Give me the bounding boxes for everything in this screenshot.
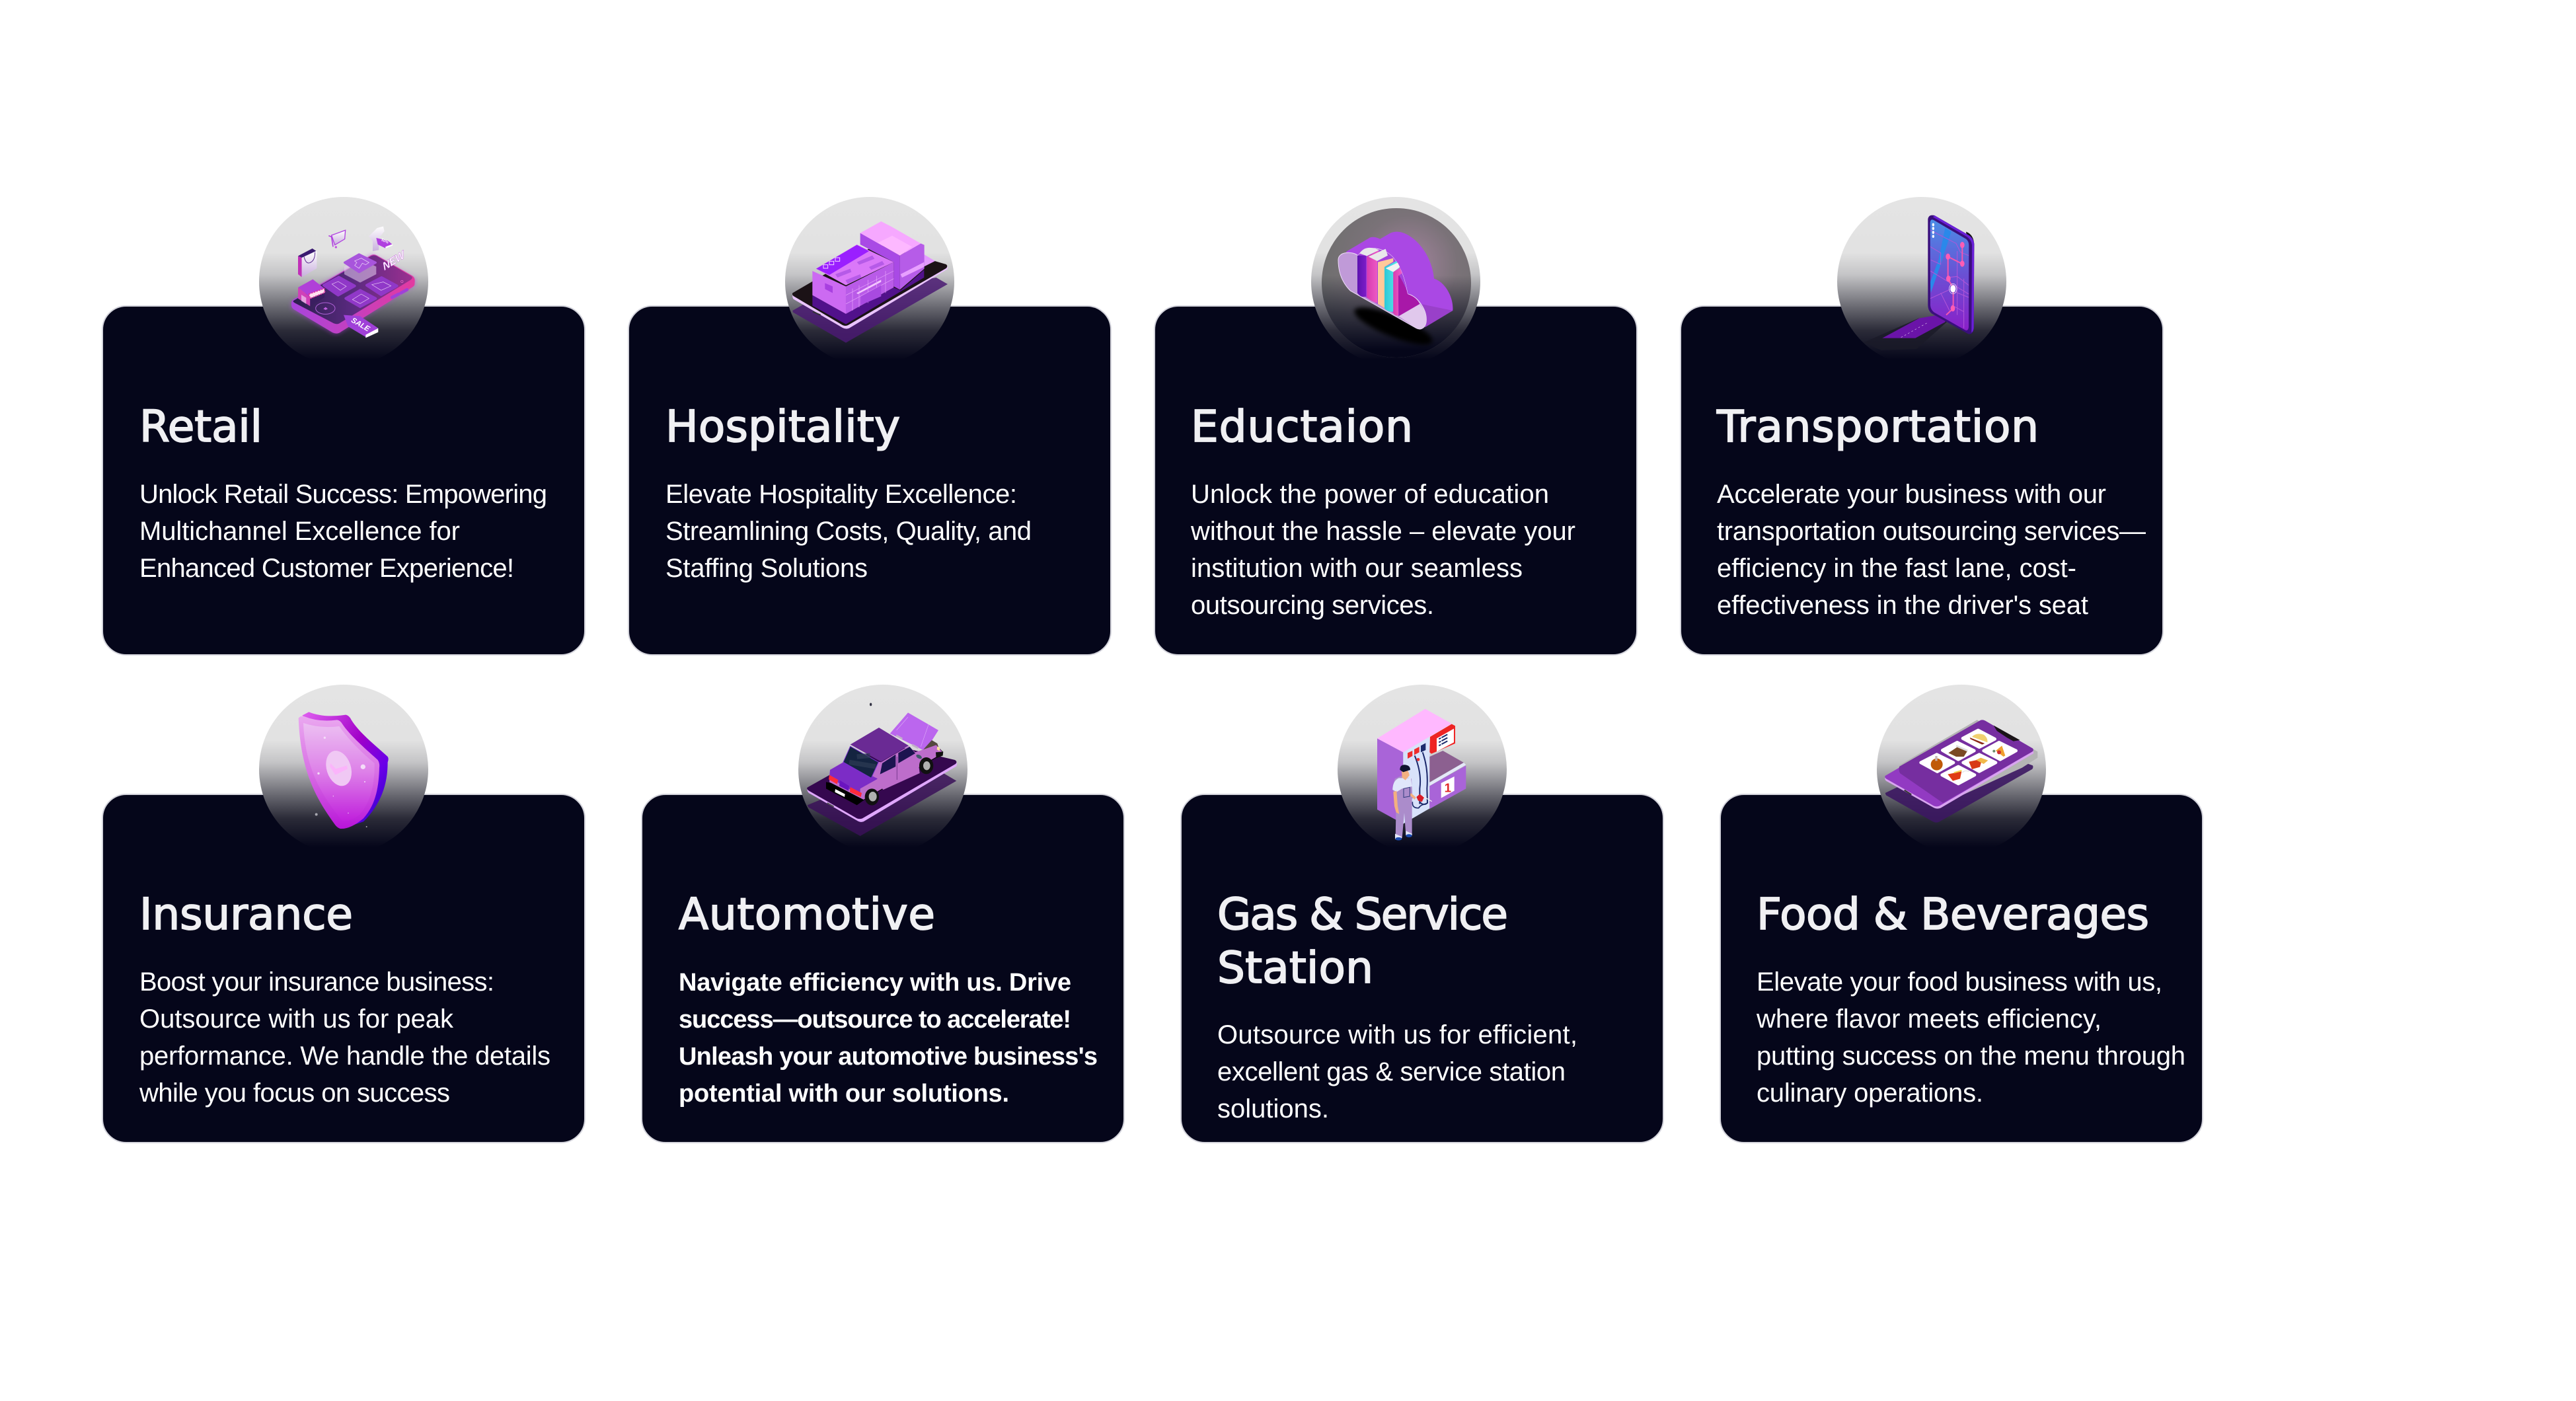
upper block bbox=[860, 233, 900, 289]
attendant bbox=[1392, 765, 1416, 841]
panel background: retail bbox=[102, 306, 585, 655]
body text: insurance bbox=[139, 967, 550, 1108]
body text: automotive bbox=[679, 969, 1098, 1108]
body text: insurance: while you focus on success bbox=[139, 1079, 450, 1108]
tiles bbox=[324, 277, 355, 295]
body text: education: outsourcing services. bbox=[1191, 591, 1434, 620]
body text: gas and service station: Outsource with us for efficient, bbox=[1217, 1020, 1577, 1049]
heading: gas and service station bbox=[1217, 889, 1508, 993]
body text: transportation: efficiency in the fast lane, cost- bbox=[1717, 554, 2076, 583]
body text: insurance: Boost your insurance business: bbox=[139, 967, 494, 997]
circle button bbox=[316, 303, 335, 314]
body text: food and beverages: putting success on the menu through bbox=[1757, 1041, 2185, 1071]
body text: automotive: Navigate efficiency with us. Drive bbox=[679, 969, 1071, 997]
icon circle and illustration: hotel on phone bbox=[785, 197, 954, 366]
icon circle and illustration: retail phone store: SALE bbox=[350, 317, 371, 334]
icon circle and illustration: retail phone store bbox=[259, 197, 428, 366]
card: hospitality bbox=[628, 197, 1111, 655]
body text: hospitality: Elevate Hospitality Excellence: bbox=[665, 480, 1017, 509]
wheels bbox=[865, 788, 879, 806]
body text: insurance: performance. We handle the details bbox=[139, 1041, 550, 1071]
card: retail bbox=[102, 197, 585, 655]
body text: retail: Multichannel Excellence for bbox=[139, 517, 460, 546]
body text: automotive: Unleash your automotive business's bbox=[679, 1043, 1098, 1071]
heading: transportation: Transportation bbox=[1716, 401, 2039, 452]
body text: retail: Enhanced Customer Experience! bbox=[139, 554, 514, 583]
body text: education: Unlock the power of education bbox=[1191, 480, 1549, 509]
body text: hospitality bbox=[665, 480, 1032, 583]
heading: insurance: Insurance bbox=[139, 889, 353, 940]
panel background: education bbox=[1155, 306, 1637, 655]
icon circle and illustration: phone with route map bbox=[1837, 197, 2006, 366]
body text: gas and service station: excellent gas & service station bbox=[1217, 1057, 1566, 1086]
body text: automotive: potential with our solutions. bbox=[679, 1080, 1009, 1108]
card: transportation bbox=[1681, 197, 2163, 655]
body text: retail bbox=[139, 480, 547, 583]
body text: retail: Unlock Retail Success: Empowering bbox=[139, 480, 547, 509]
body text: transportation: effectiveness in the driver's seat bbox=[1717, 591, 2088, 620]
cabin bbox=[851, 728, 909, 762]
icon circle and illustration: fuel pump with attendant bbox=[1338, 685, 1507, 854]
body text: food and beverages: Elevate your food business with us, bbox=[1757, 967, 2162, 997]
car body bbox=[826, 745, 943, 805]
body text: automotive: success—outsource to accelerate! bbox=[679, 1006, 1071, 1034]
heading: gas and service station: Gas & Service bbox=[1217, 889, 1508, 940]
panel background: transportation bbox=[1681, 306, 2163, 655]
panel background: gas and service station bbox=[1181, 794, 1663, 1143]
books bbox=[1357, 256, 1366, 297]
body text: gas and service station bbox=[1217, 1020, 1577, 1123]
body text: education: institution with our seamless bbox=[1191, 554, 1523, 583]
body text: transportation bbox=[1717, 480, 2146, 620]
body text: food and beverages: where flavor meets efficiency, bbox=[1756, 1004, 2102, 1034]
cart bbox=[332, 230, 346, 245]
body text: transportation: transportation outsourcing services— bbox=[1717, 517, 2146, 546]
shirt and tag bbox=[369, 227, 385, 251]
icon circle and illustration: food menu on phone bbox=[1877, 685, 2046, 854]
wing bbox=[901, 254, 935, 278]
body text: hospitality: Streamlining Costs, Quality, and bbox=[665, 517, 1032, 546]
store bbox=[298, 280, 324, 297]
food icons bbox=[1972, 734, 1987, 742]
bag bbox=[298, 256, 302, 277]
body text: insurance: Outsource with us for peak bbox=[139, 1004, 454, 1034]
icon circle and illustration: car on phone bbox=[798, 685, 967, 854]
building reflection bbox=[812, 270, 924, 324]
heading: education: Eductaion bbox=[1191, 401, 1413, 452]
icon circle and illustration: fuel pump with attendant: 1 bbox=[1445, 780, 1451, 794]
card: education bbox=[1155, 197, 1637, 655]
card: insurance bbox=[102, 685, 585, 1143]
icon circle and illustration: retail phone store: 50% bbox=[381, 238, 389, 245]
heading: automotive: Automotive bbox=[679, 889, 935, 940]
icon circle and illustration: shield bbox=[259, 685, 428, 854]
body text: hospitality: Staffing Solutions bbox=[665, 554, 868, 583]
body text: food and beverages: culinary operations. bbox=[1757, 1079, 1983, 1108]
body text: transportation: Accelerate your business with our bbox=[1717, 480, 2106, 509]
arrow SALE bbox=[344, 315, 378, 337]
hood bbox=[890, 712, 938, 751]
icon circle and illustration: cloud with books bbox=[1311, 197, 1480, 366]
main block bbox=[812, 271, 846, 314]
heading: food and beverages: Food & Beverages bbox=[1757, 889, 2149, 940]
card: gas and service station bbox=[1181, 685, 1663, 1143]
card: automotive bbox=[642, 685, 1124, 1143]
panel background: hospitality bbox=[628, 306, 1111, 655]
body text: gas and service station: solutions. bbox=[1217, 1094, 1329, 1123]
heading: gas and service station: Station bbox=[1217, 942, 1373, 993]
panel background: insurance bbox=[102, 794, 585, 1143]
panel background: food and beverages bbox=[1720, 794, 2203, 1143]
engine bbox=[922, 740, 938, 753]
panel background: automotive bbox=[642, 794, 1124, 1143]
heading: hospitality: Hospitality bbox=[665, 401, 900, 452]
heading: retail: Retail bbox=[139, 401, 262, 452]
label NEW: NEW bbox=[381, 248, 407, 273]
body text: education bbox=[1190, 480, 1575, 620]
body text: food and beverages bbox=[1756, 967, 2185, 1108]
body text: education: without the hassle – elevate your bbox=[1190, 517, 1575, 546]
menu tiles bbox=[1921, 730, 2016, 784]
card: food and beverages bbox=[1720, 685, 2203, 1143]
